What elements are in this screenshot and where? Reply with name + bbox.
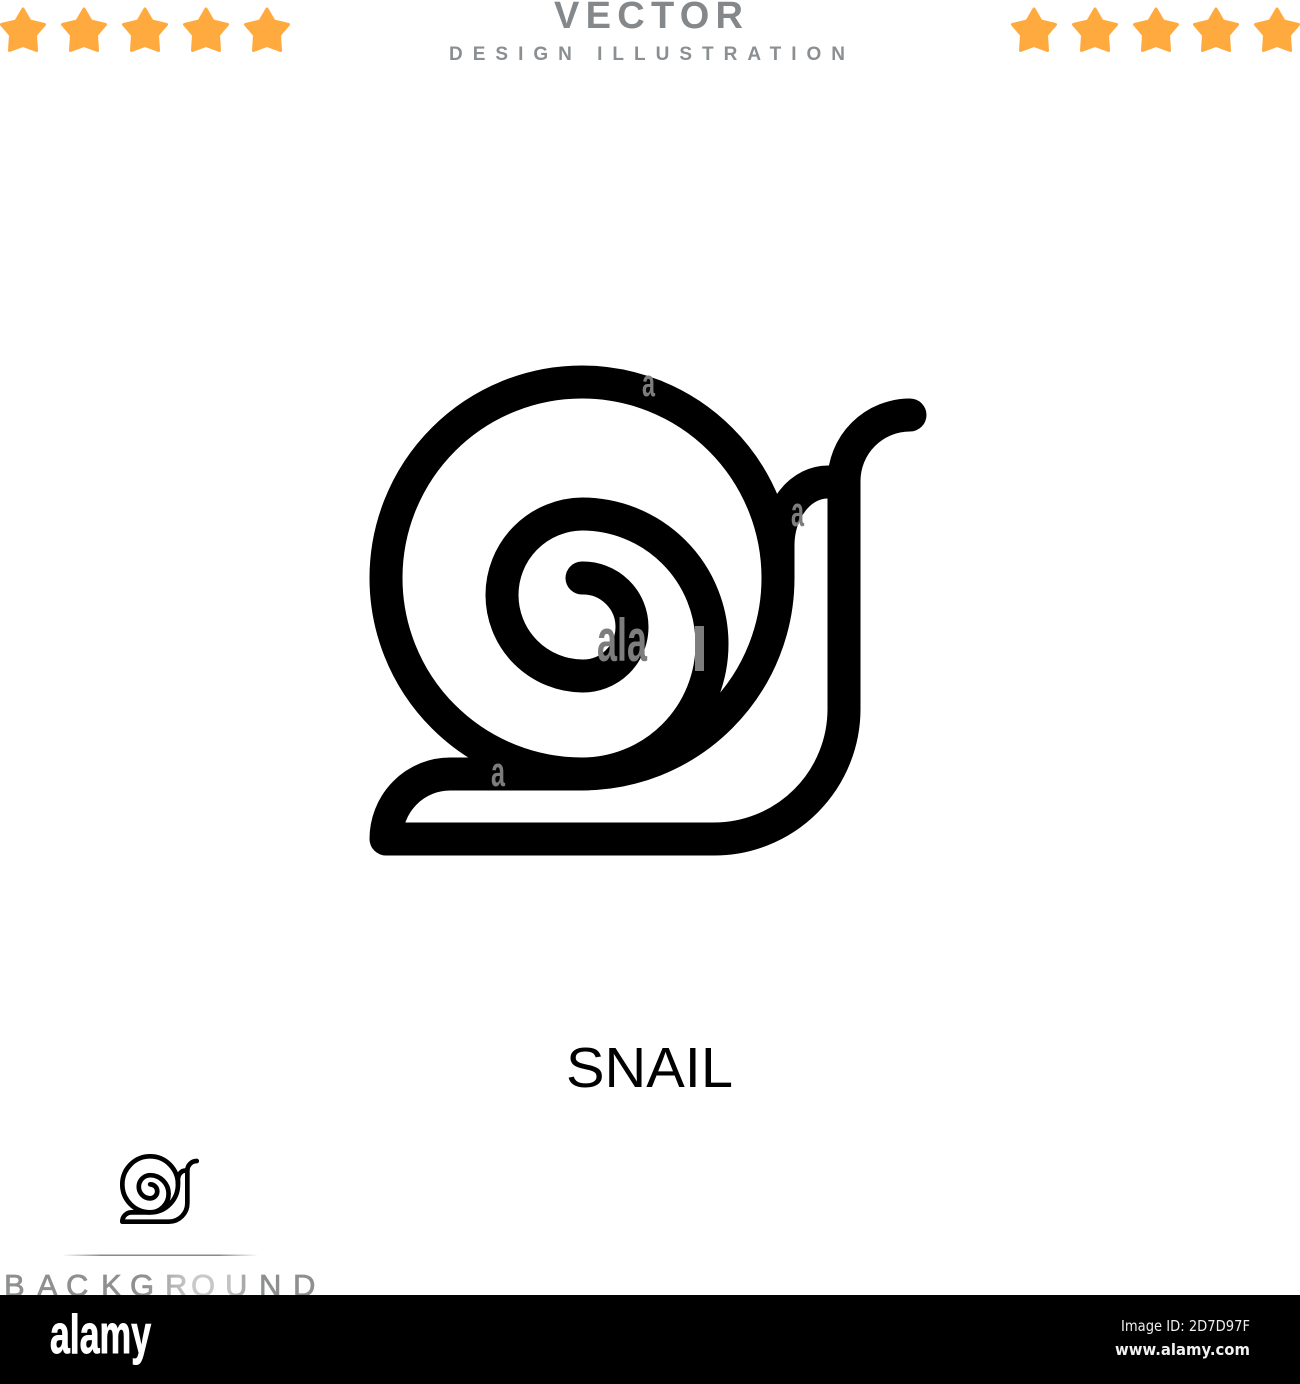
watermark fragments bbox=[491, 363, 804, 795]
text: background: BACKGROUND bbox=[4, 1268, 315, 1303]
right star rating bbox=[1012, 9, 1298, 50]
watermark fragments: ala bbox=[597, 607, 647, 674]
watermark fragments: a bbox=[642, 363, 656, 405]
snail shell spiral bbox=[386, 382, 778, 774]
snail body and tentacle bbox=[386, 415, 910, 839]
left star rating bbox=[2, 9, 288, 50]
icon: large snail bbox=[386, 382, 910, 839]
website: www.alamy.com bbox=[1115, 1340, 1250, 1359]
second tentacle bbox=[778, 482, 844, 578]
footer bar bbox=[0, 1295, 1300, 1384]
label: snail: SNAIL bbox=[566, 1036, 733, 1100]
logo: alamy: alamy bbox=[50, 1303, 151, 1365]
subheading: design illustration: DESIGN ILLUSTRATION bbox=[449, 44, 845, 65]
icon: small snail bbox=[122, 1156, 197, 1222]
watermark fragments: a bbox=[491, 748, 505, 795]
image id: Image ID: 2D7D97F bbox=[1121, 1317, 1250, 1335]
watermark fragments: a bbox=[791, 488, 804, 535]
